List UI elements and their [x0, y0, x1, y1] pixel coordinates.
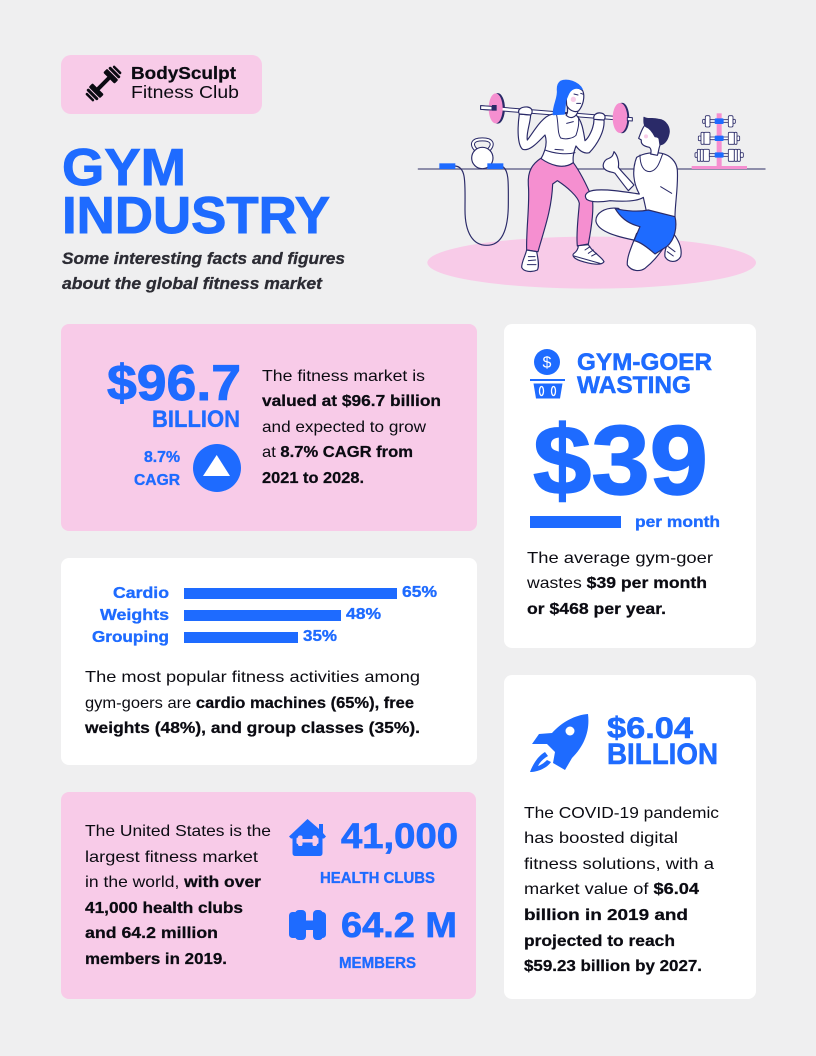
- icon: gym house: [289, 819, 326, 856]
- US market text: members in 2019.: [85, 951, 227, 968]
- headline figure: $6.04: [607, 712, 693, 745]
- activities text: The most popular fitness activities among: [85, 669, 420, 686]
- headline figure: [607, 712, 718, 771]
- back foot: [665, 233, 681, 261]
- subtitle: [62, 250, 345, 293]
- title: INDUSTRY: [62, 187, 330, 245]
- wasting text: The average gym-goer: [527, 550, 714, 567]
- CAGR label: 8.7%: [144, 449, 180, 466]
- wasting text: wastes $39 per month: [526, 575, 707, 592]
- big number: $96.7: [107, 355, 241, 411]
- shorts: [615, 208, 676, 254]
- icon: money in bin: [530, 349, 565, 398]
- market text: The fitness market is: [262, 368, 425, 385]
- billion label: BILLION: [152, 406, 240, 433]
- right shoe: [573, 245, 604, 264]
- US market text: and 64.2 million: [85, 925, 218, 942]
- US market text: [85, 823, 271, 968]
- digital text: The COVID-19 pandemic: [524, 805, 719, 822]
- bar chart: 35%: [303, 628, 337, 645]
- market text: [262, 368, 441, 487]
- digital text: has boosted digital: [524, 830, 678, 847]
- man: [585, 117, 681, 271]
- CAGR label: [134, 449, 180, 489]
- logo name: BodySculpt: [131, 63, 236, 83]
- heading: WASTING: [577, 372, 691, 399]
- title: [62, 139, 330, 245]
- US market text: largest fitness market: [85, 849, 259, 866]
- wasting text: [526, 550, 714, 618]
- clubs number: 41,000: [341, 817, 458, 856]
- logo badge: [61, 55, 262, 114]
- digital text: fitness solutions, with a: [524, 856, 714, 873]
- members label: MEMBERS: [339, 955, 416, 972]
- panel: gym-goer wasting: [504, 324, 756, 648]
- jump rope: [439, 163, 508, 245]
- barbell: [481, 93, 632, 133]
- digital text: projected to reach: [524, 933, 675, 950]
- torso and arm: [585, 153, 678, 217]
- digital text: market value of $6.04: [524, 881, 699, 898]
- bar chart: Cardio: [113, 585, 169, 602]
- bar chart: Grouping: [92, 629, 169, 646]
- panel: united states market: [61, 792, 476, 999]
- members number: 64.2 M: [341, 906, 457, 945]
- US market text: The United States is the: [85, 823, 271, 840]
- heading: GYM-GOER: [577, 349, 712, 376]
- digital text: [524, 805, 719, 975]
- market text: and expected to grow: [262, 419, 426, 436]
- head: [639, 125, 660, 155]
- left shoe: [522, 250, 538, 271]
- per month: per month: [635, 514, 720, 531]
- panel: digital fitness: [504, 675, 756, 999]
- wasting text: or $468 per year.: [527, 601, 666, 618]
- headline figure: BILLION: [607, 738, 718, 771]
- bar chart: Weights: [100, 607, 169, 624]
- leggings: [527, 158, 593, 252]
- icon: dumbbell: [289, 910, 326, 940]
- US market text: 41,000 health clubs: [85, 900, 243, 917]
- dumbbell rack: [692, 113, 747, 169]
- market text: at 8.7% CAGR from: [262, 444, 413, 461]
- hair and ponytail: [553, 80, 582, 115]
- bar chart: 65%: [402, 584, 437, 601]
- subtitle: about the global fitness market: [62, 275, 324, 293]
- raised arm and thumb: [603, 152, 634, 191]
- icon: up triangle: [193, 444, 241, 492]
- panel: market value: [61, 324, 477, 531]
- panel: popular activities: [61, 558, 477, 765]
- big number: $39: [533, 405, 708, 515]
- icon: money in bin: $: [543, 354, 552, 372]
- market text: valued at $96.7 billion: [262, 393, 441, 410]
- illustration: trainer coaching a woman lifting a barbell: [418, 80, 765, 289]
- activities text: [84, 669, 420, 737]
- subtitle: Some interesting facts and figures: [62, 250, 345, 268]
- CAGR label: CAGR: [134, 472, 180, 489]
- kettlebell: [472, 139, 493, 169]
- hands: [519, 107, 532, 115]
- body and arms: [518, 113, 604, 166]
- digital text: $59.23 billion by 2027.: [524, 958, 702, 975]
- icon: rocket: [530, 714, 588, 772]
- woman: [518, 80, 605, 271]
- market text: 2021 to 2028.: [262, 470, 364, 487]
- digital text: billion in 2019 and: [524, 907, 688, 924]
- neck and face: [566, 103, 578, 118]
- logo subtitle: Fitness Club: [131, 82, 239, 102]
- icon: dumbbell logo: [83, 63, 124, 104]
- heading: [577, 349, 712, 399]
- hair: [644, 117, 669, 145]
- US market text: in the world, with over: [85, 874, 261, 891]
- title: GYM: [62, 139, 186, 197]
- bar chart: 48%: [346, 606, 381, 623]
- accent bar: [530, 516, 621, 528]
- floor line: [418, 167, 765, 171]
- bar chart: [92, 584, 437, 646]
- activities text: weights (48%), and group classes (35%).: [84, 720, 420, 737]
- knee and lower leg: [596, 208, 643, 241]
- activities text: gym-goers are cardio machines (65%), free: [85, 695, 414, 712]
- floor ellipse: [427, 237, 756, 289]
- clubs label: HEALTH CLUBS: [320, 870, 435, 887]
